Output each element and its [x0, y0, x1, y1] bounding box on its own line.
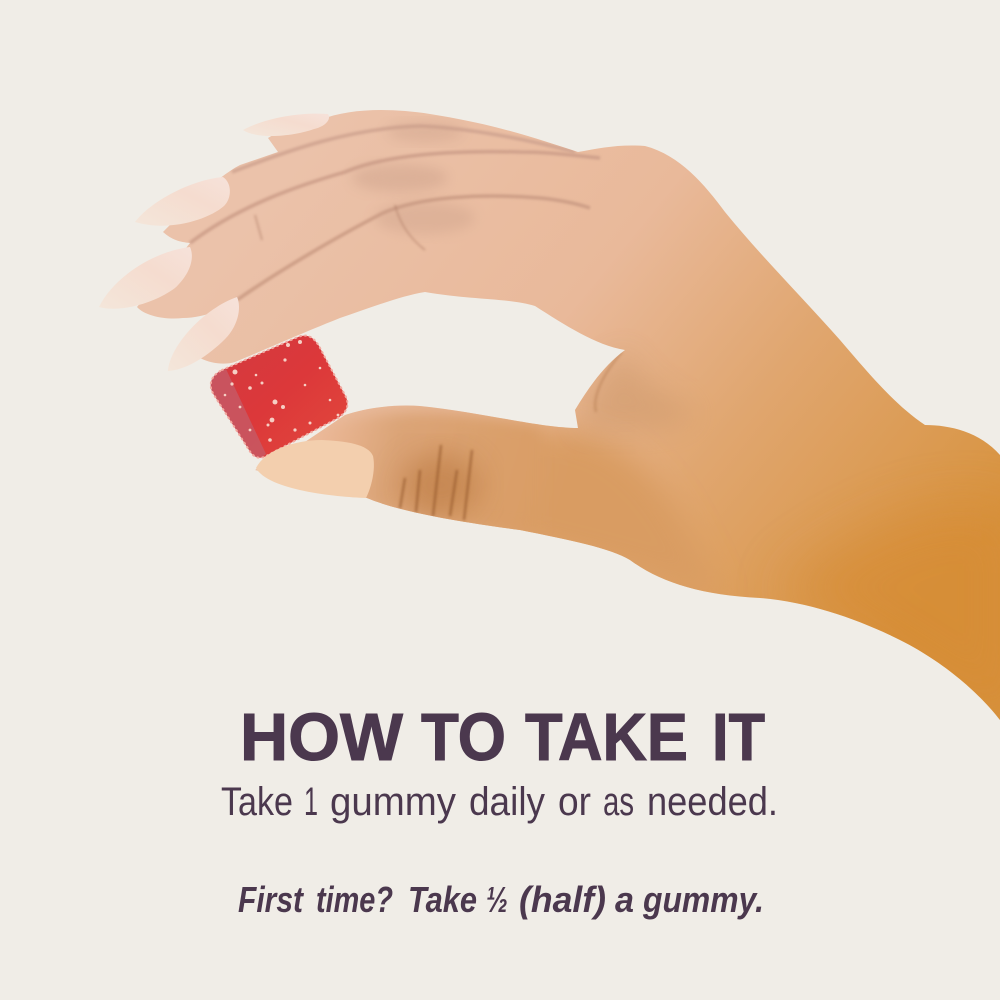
hand silhouette: [137, 110, 1000, 720]
title: IT: [712, 700, 765, 775]
icon: thumb nail: [256, 440, 374, 498]
first time note: ½: [486, 879, 508, 920]
first time note: [238, 879, 764, 920]
subtitle: needed.: [647, 780, 778, 824]
icon: gummy: [211, 336, 347, 458]
subtitle: gummy: [330, 780, 456, 824]
subtitle: as: [603, 780, 634, 824]
infographic canvas: [99, 110, 1000, 920]
title: [240, 700, 765, 775]
subtitle: or: [558, 780, 591, 824]
icon: index nail: [168, 297, 239, 371]
knuckle creases: [394, 128, 455, 140]
subtitle: [221, 780, 778, 824]
first time note: Take: [408, 879, 477, 920]
icon: middle nail: [99, 247, 192, 309]
title: TAKE: [525, 700, 688, 775]
hand shading: [190, 122, 1000, 740]
title: TO: [421, 700, 506, 775]
icon: hand holding gummy: [99, 110, 1000, 740]
subtitle: daily: [469, 780, 545, 824]
icon: pinky nail: [243, 114, 329, 136]
first time note: gummy.: [642, 879, 764, 920]
first time note: time?: [316, 879, 393, 920]
subtitle: Take: [221, 780, 293, 824]
first time note: (half): [519, 879, 606, 920]
icon: ring nail: [135, 177, 230, 226]
title: HOW: [240, 700, 404, 775]
first time note: a: [615, 879, 634, 920]
thumb creases: [400, 453, 480, 517]
first time note: First: [238, 879, 305, 920]
finger separation shadows: [232, 126, 575, 172]
subtitle: 1: [304, 780, 318, 824]
